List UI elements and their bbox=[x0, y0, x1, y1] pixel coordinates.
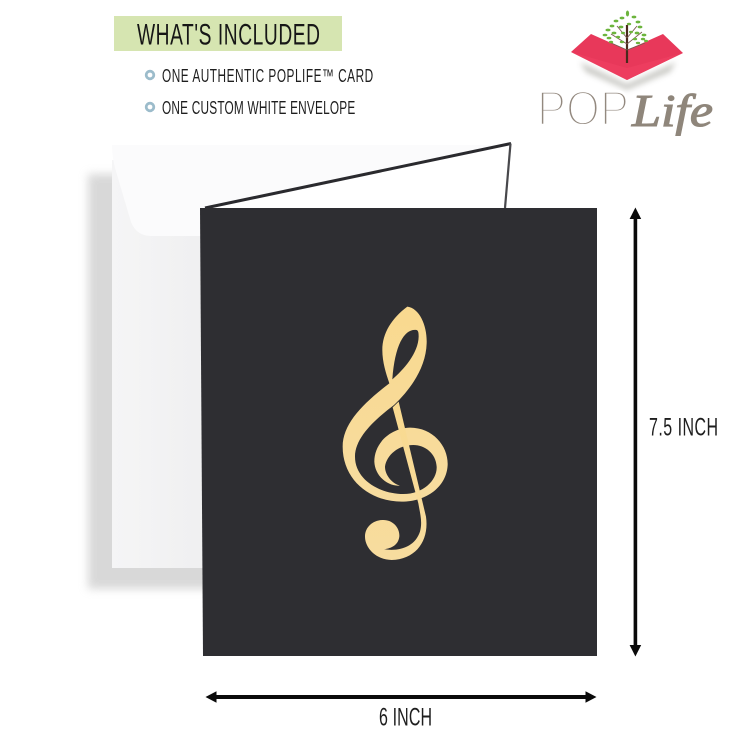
icon: treble clef bbox=[343, 307, 448, 560]
heading: what's included: WHAT'S INCLUDED bbox=[137, 18, 320, 52]
card front bbox=[200, 208, 597, 656]
envelope body bbox=[112, 160, 212, 568]
text: pop: POP bbox=[537, 82, 629, 136]
text: card item: ONE AUTHENTIC POPLIFE™ CARD bbox=[162, 67, 373, 87]
envelope shadow bbox=[88, 174, 213, 589]
icon: tree bbox=[603, 10, 648, 63]
label: height: 7.5 INCH bbox=[649, 414, 718, 441]
icon: red open book bbox=[571, 34, 683, 90]
label: width: 6 INCH bbox=[379, 704, 432, 731]
envelope flap bbox=[112, 145, 505, 236]
flap shadow bbox=[150, 236, 420, 240]
logo: poplife bbox=[537, 10, 713, 136]
card back panel bbox=[205, 144, 511, 208]
text: life: Life bbox=[631, 85, 713, 136]
arrow: height bbox=[630, 208, 641, 656]
icon: bullet one bbox=[146, 71, 154, 79]
envelope bbox=[88, 145, 505, 589]
icon: bullet two bbox=[146, 103, 154, 111]
list: included items bbox=[146, 67, 373, 119]
text: envelope item: ONE CUSTOM WHITE ENVELOPE bbox=[162, 99, 355, 119]
arrow: width bbox=[206, 691, 596, 703]
